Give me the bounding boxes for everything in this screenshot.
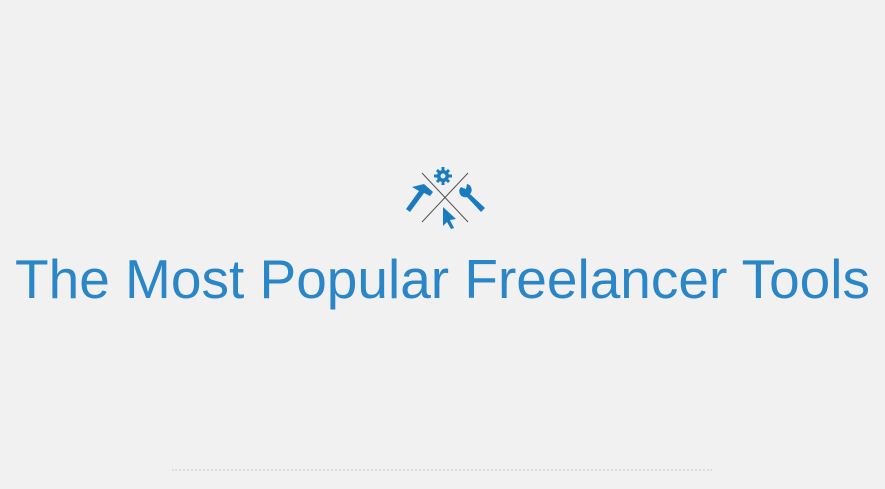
dotted divider — [172, 469, 712, 471]
icon: crossed tools — [406, 167, 485, 229]
title: The Most Popular Freelancer Tools — [15, 248, 870, 310]
